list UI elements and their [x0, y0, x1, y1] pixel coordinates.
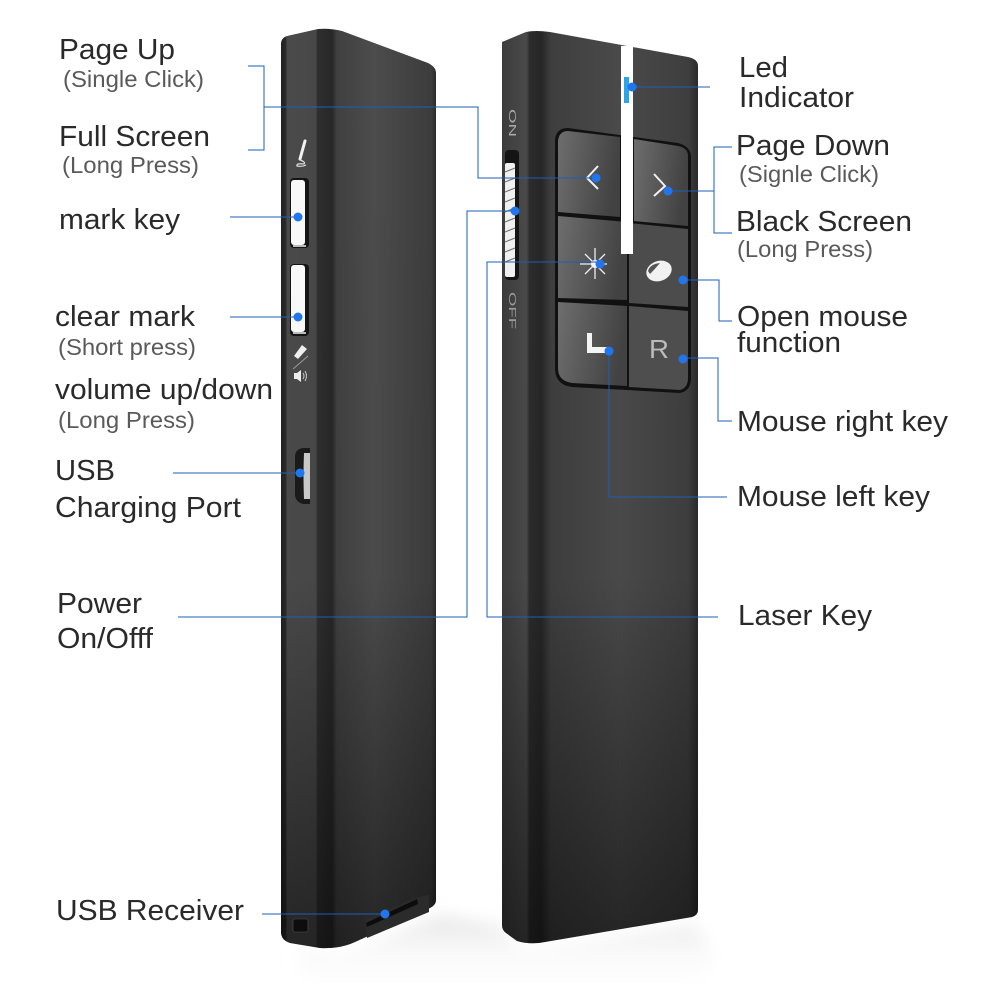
- floor shadow: [300, 915, 715, 985]
- labels: left column: [55, 34, 273, 927]
- label: Page Up: Page Up: [59, 34, 175, 66]
- clear mark key: [290, 264, 309, 336]
- USB charging port: [295, 448, 310, 504]
- label: Black Screen: [736, 206, 912, 262]
- key: L: [558, 302, 627, 386]
- label: Led Indicator: [739, 52, 854, 114]
- label: Led Indicator: Led: [739, 52, 788, 84]
- label: clear mark: [55, 301, 196, 360]
- icon: right chevron: [654, 174, 665, 196]
- label: USB Charging Port: USB: [55, 455, 115, 487]
- front view device: [502, 31, 698, 943]
- label: Page Down: Page Down: [736, 130, 890, 162]
- icon: mouse: [643, 257, 675, 285]
- device body: front view: [502, 31, 698, 943]
- label: Open mouse function: function: [737, 327, 841, 359]
- icon: pen mark: [297, 141, 306, 166]
- label: Page Down: (Signle Click): [739, 161, 879, 187]
- label: Power On/Off: On/Offf: [57, 623, 154, 655]
- lanyard hole: [293, 919, 308, 932]
- label: volume up/down: [55, 374, 273, 433]
- label: Full Screen: Full Screen: [59, 121, 210, 153]
- label: Open mouse function: Open mouse: [737, 301, 908, 333]
- L letter: [587, 333, 607, 353]
- key: previous: [558, 131, 620, 217]
- label: Power On/Off: Power: [57, 588, 142, 620]
- label: Open mouse function: [737, 301, 908, 359]
- icon: laser burst: [580, 248, 607, 279]
- label: clear mark: (Short press): [58, 334, 196, 360]
- key: next: [634, 139, 688, 226]
- label: USB Charging Port: Charging Port: [55, 492, 241, 524]
- label: Full Screen: (Long Press): [62, 152, 199, 178]
- label: Led Indicator: Indicator: [739, 82, 854, 114]
- power switch: [505, 150, 519, 280]
- side view device: [281, 29, 436, 948]
- leader lines: [173, 66, 732, 914]
- label: volume up/down: (Long Press): [58, 407, 195, 433]
- label: Full Screen: [59, 121, 210, 178]
- connector dots: [294, 82, 688, 918]
- label: Black Screen: (Long Press): [737, 236, 873, 262]
- key: R: [629, 306, 688, 390]
- label: Page Up: (Single Click): [63, 66, 204, 92]
- key: laser: [558, 216, 627, 300]
- label: Black Screen: Black Screen: [736, 206, 912, 238]
- label: volume up/down: volume up/down: [55, 374, 273, 406]
- label: mark key: mark key: [59, 204, 181, 236]
- label: clear mark: clear mark: [55, 301, 196, 333]
- label: Laser Key: Laser Key: [738, 600, 873, 632]
- key: mouse: [629, 223, 688, 307]
- label: Page Down: [736, 130, 890, 187]
- keypad: [555, 128, 691, 393]
- label: USB Charging Port: [55, 455, 241, 524]
- icon: eraser and speaker: [293, 345, 308, 382]
- label: Mouse left key: Mouse left key: [737, 481, 931, 513]
- R letter: R: [649, 334, 669, 364]
- labels: right column: [736, 52, 949, 632]
- label: Page Up: [59, 34, 204, 92]
- mark key: [290, 178, 309, 248]
- receiver slot: [365, 895, 429, 938]
- switch label ON: ON: [506, 109, 517, 137]
- label: Power On/Off: [57, 588, 154, 655]
- device body: side view: [281, 29, 436, 948]
- switch label OFF: OFF: [506, 292, 517, 329]
- icon: left chevron: [587, 166, 598, 189]
- label: Mouse right key: Mouse right key: [737, 406, 949, 438]
- label: USB Receiver: USB Receiver: [56, 895, 244, 927]
- LED strip: [621, 46, 633, 254]
